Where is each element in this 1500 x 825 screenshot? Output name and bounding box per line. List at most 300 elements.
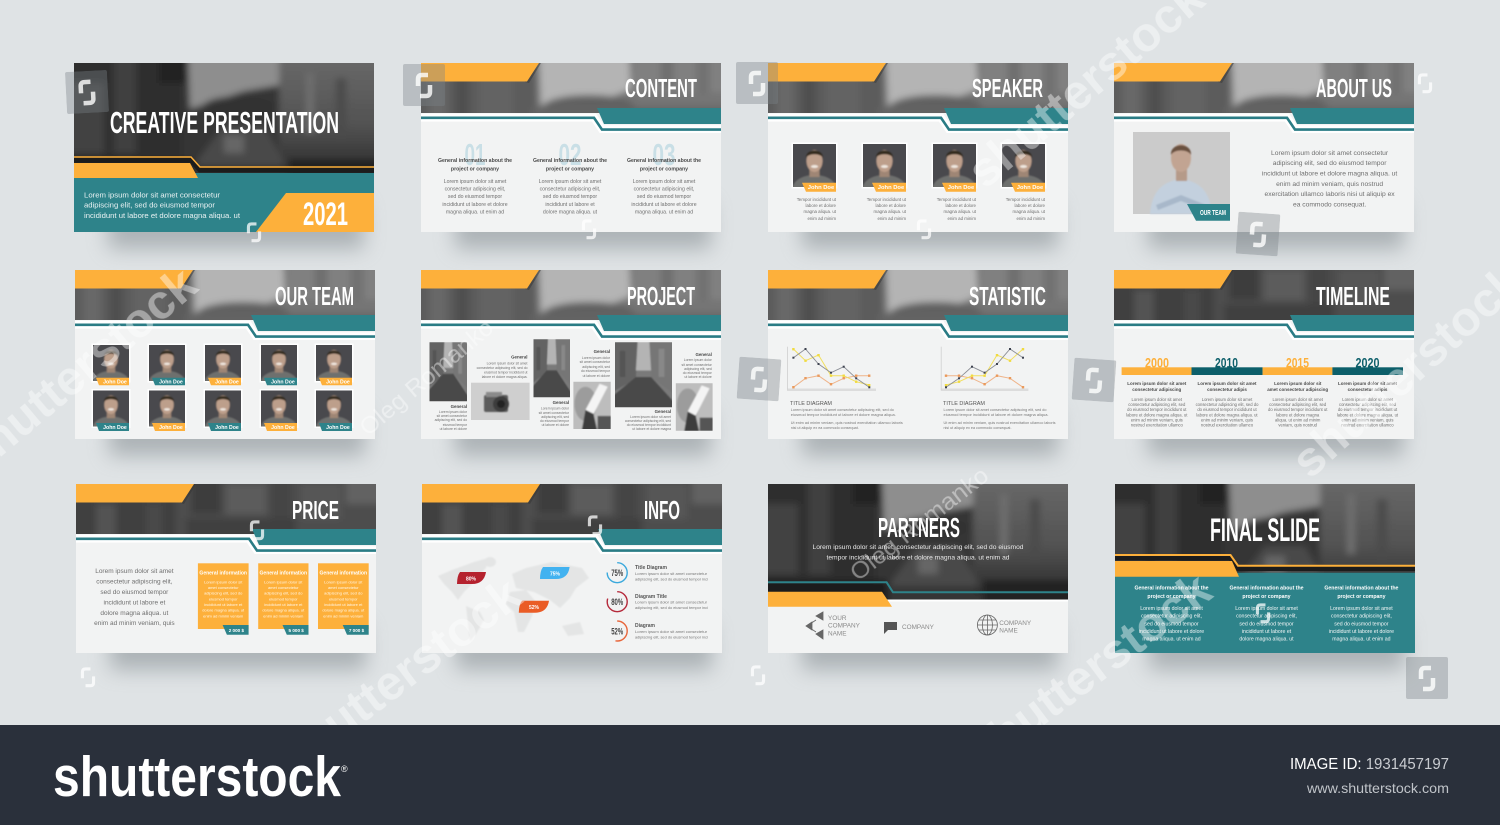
timeline text columns: consectetur adipiscing elit, sed: [1269, 402, 1327, 407]
timeline text columns: nostrud exercitation ullamco: [1201, 422, 1254, 428]
body text: incididunt ut labore et dolore magna aliqua. ut: [1262, 170, 1397, 177]
team grid: John Doe: [326, 425, 350, 431]
timeline text columns: [1126, 381, 1399, 428]
timeline text columns: consectetur adipiscing elit, sed do: [1196, 402, 1259, 407]
column text 2: project or company: [1242, 594, 1291, 600]
speaker card 4: Tempor incididunt ut: [1006, 197, 1046, 202]
intro text: dolore magna aliqua. ut: [100, 610, 169, 617]
caption blocks: [435, 349, 713, 431]
column text 3: consectetur adipiscing elit,: [1331, 614, 1392, 620]
price card 3: incididunt ut labore et: [324, 602, 363, 607]
chart text 2: eiusmod tempor incididunt ut labore et dolore magna aliqua.: [944, 413, 1048, 417]
column text 1: consectetur adipiscing elit,: [445, 186, 505, 192]
chart text 1: TITLE DIAGRAM: [790, 401, 833, 407]
price card 1: eiusmod tempor: [209, 596, 238, 601]
price card 3: [318, 563, 369, 635]
panel: speaker slide: [758, 53, 1078, 232]
timeline text columns: nostrud exercitation ullamco: [1341, 422, 1394, 428]
column text 3: consectetur adipiscing elit,: [634, 186, 694, 192]
speaker card 4: enim ad minim: [1016, 216, 1045, 221]
footer bar: [0, 725, 1500, 825]
subtitle: [812, 544, 1024, 562]
speaker card 4: John Doe: [1017, 185, 1044, 191]
map tag: blue: 75%: [550, 572, 561, 578]
column text 1: General information about the: [1134, 586, 1209, 592]
team grid: John Doe: [271, 425, 295, 431]
column text 3: incididunt ut labore et dolore: [1329, 629, 1394, 635]
timeline text columns: enim ad minim veniam, quis: [1342, 418, 1393, 422]
logo: your company name: COMPANY: [828, 623, 861, 630]
speaker card 2: John Doe: [878, 185, 905, 191]
panel: partners slide: [758, 474, 1078, 664]
caption blocks: do eiusmod tempor incididunt: [627, 423, 671, 427]
speaker card 1: John Doe: [808, 185, 835, 191]
caption blocks: General: [594, 349, 610, 354]
timeline text columns: veniam, quis nostrud: [1278, 422, 1318, 428]
speaker card 3: [930, 141, 979, 221]
label: our team: [1187, 204, 1230, 221]
column text 3: magna aliqua. ut enim ad: [635, 210, 693, 216]
column text 2: General information about the: [533, 158, 607, 164]
donut: 80%: [607, 592, 627, 612]
caption blocks: ut labore et dolore magna: [632, 427, 671, 431]
timeline years: 2010: [1215, 354, 1238, 370]
speaker card 4: magna aliqua. ut: [1013, 209, 1046, 214]
price card 1: Lorem ipsum dolor sit: [204, 579, 243, 584]
chart text 2: TITLE DIAGRAM: [943, 401, 986, 407]
donut captions: Lorem ipsum dolor sit amet consectetur: [635, 630, 708, 634]
column text 1: magna aliqua. ut enim ad: [1142, 637, 1201, 643]
price card 1: enim ad minim veniam: [203, 613, 244, 618]
chart text 1: Ut enim ad minim veniam, quis nostrud exercitation ullamco laboris: [791, 421, 903, 425]
panel: our team slide: [65, 260, 385, 439]
panel: statistic slide: [758, 260, 1078, 439]
speaker card 1: [790, 141, 839, 221]
speaker card 3: enim ad minim: [947, 216, 976, 221]
column text 1: [438, 158, 512, 216]
slide shadows: [108, 203, 1405, 670]
price card 1: dolore magna aliqua. ut: [202, 608, 245, 613]
intro text: [94, 568, 175, 627]
map tag: orange: [519, 601, 549, 613]
subtitle: tempor incididunt ut labore et dolore magna aliqua. ut enim ad: [826, 555, 1010, 562]
chart text 2: nisi ut aliquip ex ea commodo consequat.: [944, 426, 1012, 430]
column text 2: General information about the: [1229, 586, 1304, 592]
logo: your company name: YOUR: [828, 615, 847, 622]
team grid: John Doe: [103, 379, 127, 385]
timeline bar: [1122, 367, 1403, 375]
donut: 75%: [607, 563, 627, 583]
price card 1: 2 000 $: [229, 628, 245, 633]
logo: company globe: [977, 615, 1032, 635]
intro text: adipiscing elit, sed do eiusmod tempor: [84, 200, 216, 210]
line chart 2: [941, 347, 1028, 391]
caption blocks: General: [553, 400, 569, 405]
label: our team: OUR TEAM: [1200, 210, 1226, 217]
column text 1: magna aliqua. ut enim ad: [446, 210, 504, 216]
speaker card 3: labore et dolore: [945, 203, 977, 208]
caption blocks: Lorem ipsum dolor: [582, 356, 611, 360]
body text: [1262, 150, 1397, 208]
team grid: John Doe: [271, 379, 295, 385]
title: PARTNERS: [878, 512, 960, 543]
price card 1: incididunt ut labore et: [204, 602, 243, 607]
caption blocks: Lorem ipsum dolor: [439, 410, 468, 414]
intro text: sed do eiusmod tempor: [100, 589, 169, 596]
speaker card 1: magna aliqua. ut: [804, 209, 837, 214]
column text 1: sed do eiusmod tempor: [448, 194, 502, 200]
column text 2: sed do eiusmod tempor: [543, 194, 597, 200]
logo: your company name: [806, 612, 861, 639]
price card 2: eiusmod tempor: [269, 596, 298, 601]
timeline text columns: Lorem ipsum dolor sit amet: [1338, 381, 1398, 386]
world map: [438, 557, 589, 641]
team grid: [90, 342, 355, 431]
timeline text columns: consectetur adipiscing elit, sed: [1339, 402, 1397, 407]
donut captions: Lorem ipsum dolor sit amet consectetur: [635, 601, 708, 605]
timeline text columns: do eiusmod tempor incididunt ut: [1127, 407, 1187, 412]
column text 3: magna aliqua. ut enim ad: [1332, 637, 1391, 643]
speaker card 3: Tempor incididunt ut: [937, 197, 977, 202]
price card 3: General information: [320, 570, 367, 576]
column text 2: Lorem ipsum dolor sit amet: [1235, 606, 1298, 612]
caption blocks: General: [511, 354, 528, 360]
watermark text: Oleg Romanko: [355, 314, 499, 442]
panel: timeline slide: [1104, 260, 1424, 439]
price card 2: [258, 563, 308, 635]
title: ABOUT US: [1316, 73, 1392, 103]
caption blocks: adipiscing elit, sed: [684, 367, 712, 371]
timeline text columns: consectetur adipiscing: [1132, 387, 1182, 392]
timeline text columns: Lorem ipsum dolor sit amet: [1202, 397, 1253, 402]
column text 2: consectetur adipiscing elit,: [1236, 614, 1297, 620]
column text 2: dolore magna aliqua. ut: [543, 210, 598, 216]
chart text 1: Lorem ipsum dolor sit amet consectetur adipiscing elit, sed do: [791, 408, 894, 412]
timeline text columns: amet consectetur adipiscing: [1267, 387, 1328, 392]
timeline years: 2015: [1286, 354, 1309, 370]
body text: enim ad minim veniam, quis nostrud: [1276, 181, 1383, 188]
registered mark: ®: [341, 764, 348, 774]
column text 3: General information about the: [627, 158, 701, 164]
column text 1: project or company: [1147, 594, 1196, 600]
panel: final slide: [1105, 474, 1425, 664]
year: 2021: [303, 196, 348, 232]
caption blocks: General: [655, 409, 671, 414]
speaker card 2: labore et dolore: [875, 203, 907, 208]
caption blocks: ut labore et dolore: [542, 423, 569, 427]
timeline text columns: do eiusmod tempor incididunt ut: [1338, 407, 1398, 412]
column text 1: Lorem ipsum dolor sit amet: [444, 179, 507, 185]
column numbers: 03: [652, 137, 676, 172]
title: PRICE: [292, 495, 339, 525]
column numbers: [464, 137, 676, 172]
watermark icons: [65, 62, 1448, 699]
portrait: [1133, 132, 1230, 214]
photo: camera: [471, 383, 530, 420]
caption blocks: adipiscing elit, sed do: [435, 418, 467, 422]
donut captions: adipiscing elit, sed do eiusmod tempor inci: [635, 635, 708, 639]
column text 2: [1229, 586, 1304, 643]
column text 3: sed do eiusmod tempor: [637, 194, 691, 200]
price card 3: Lorem ipsum dolor sit: [324, 579, 363, 584]
body text: adipiscing elit, sed do eiusmod tempor: [1273, 160, 1387, 167]
donut captions: Lorem ipsum dolor sit amet consectetur: [635, 572, 708, 576]
timeline years: 2000: [1145, 354, 1169, 370]
photo: hand with phone 2: [673, 380, 716, 434]
logo: company speech bubble: [884, 622, 935, 634]
chart text 2: [943, 401, 1056, 430]
price card 3: dolore magna aliqua. ut: [322, 608, 365, 613]
column text 1: consectetur adipiscing elit,: [1141, 614, 1202, 620]
column text 2: [533, 158, 607, 216]
price card 2: incididunt ut labore et: [264, 602, 303, 607]
timeline text columns: labore et dolore magna aliqua. ut: [1126, 412, 1188, 418]
column numbers: 02: [558, 137, 582, 172]
column text 3: Lorem ipsum dolor sit amet: [1330, 606, 1393, 612]
donut: 75%: 75%: [611, 568, 623, 578]
intro text: incididunt ut labore et: [104, 600, 165, 607]
caption blocks: adipiscing elit, sed: [541, 415, 569, 419]
caption blocks: consectetur adipiscing elit, sed do: [477, 366, 528, 370]
caption blocks: Lorem ipsum dolor: [541, 406, 570, 410]
intro text: Lorem ipsum dolor sit amet: [95, 568, 174, 575]
intro text: Lorem ipsum dolor sit amet consectetur: [84, 190, 221, 200]
title: STATISTIC: [969, 281, 1046, 311]
speaker card 1: enim ad minim: [807, 216, 836, 221]
line chart 1: [787, 347, 876, 391]
donut captions: adipiscing elit, sed do eiusmod tempor inci: [635, 606, 708, 610]
donut: 80%: 80%: [611, 597, 623, 607]
caption blocks: sit amet consectetur: [437, 414, 468, 418]
timeline text columns: Lorem ipsum dolor sit amet: [1197, 381, 1257, 386]
price card 2: adipiscing elit, sed do: [264, 591, 303, 596]
caption blocks: ut labore et dolore: [440, 427, 467, 431]
speaker card 2: magna aliqua. ut: [874, 209, 907, 214]
timeline text columns: consectetur adipis: [1348, 387, 1388, 392]
caption blocks: Lorem ipsum dolor: [684, 358, 713, 362]
column text 2: dolore magna aliqua. ut: [1239, 637, 1294, 643]
timeline text columns: Lorem ipsum dolor sit amet: [1132, 397, 1183, 402]
column text 1: [1134, 586, 1209, 643]
donut captions: Diagram: [635, 623, 656, 629]
column text 3: [1324, 586, 1399, 643]
team grid: John Doe: [326, 379, 350, 385]
price card 1: amet consectetur: [208, 585, 239, 590]
column text 3: sed do eiusmod tempor: [1334, 622, 1389, 628]
donut captions: [635, 565, 708, 639]
price card 1: General information: [199, 570, 247, 576]
caption blocks: consectetur adipiscing elit, sed: [625, 419, 671, 423]
speaker card 2: enim ad minim: [877, 216, 906, 221]
price card 2: dolore magna aliqua. ut: [262, 608, 305, 613]
caption blocks: Lorem ipsum dolor sit amet: [487, 362, 528, 366]
caption blocks: eiusmod tempor incididunt ut: [484, 370, 528, 374]
column text 3: project or company: [640, 166, 688, 172]
speaker card 2: Tempor incididunt ut: [867, 197, 907, 202]
intro text: incididunt ut labore et dolore magna aliqua. ut: [84, 211, 240, 220]
chart text 1: eiusmod tempor incididunt ut labore et dolore magna aliqua.: [791, 413, 896, 417]
donut captions: Diagram Title: [635, 594, 667, 600]
column text 2: Lorem ipsum dolor sit amet: [539, 179, 602, 185]
chart text 1: nisi ut aliquip ex ea commodo consequat.: [791, 426, 859, 430]
column text 3: incididunt ut labore et dolore: [631, 202, 697, 208]
website: www.shutterstock.com: [1306, 780, 1449, 796]
panel: content slide: [411, 53, 731, 232]
column text 1: incididunt ut labore et dolore: [442, 202, 508, 208]
price card 3: amet consectetur: [328, 585, 359, 590]
caption blocks: do eiusmod tempor: [683, 371, 713, 375]
watermark text: shutterstock: [268, 568, 531, 785]
column text 3: [627, 158, 701, 216]
column text 3: project or company: [1337, 594, 1386, 600]
image id: IMAGE ID: 1931457197: [1290, 756, 1449, 773]
column text 2: incididunt ut labore et: [545, 202, 595, 208]
title: OUR TEAM: [275, 281, 354, 311]
logo: company globe: NAME: [999, 628, 1018, 634]
speaker card 3: John Doe: [948, 185, 975, 191]
column text 2: sed do eiusmod tempor: [1239, 622, 1294, 628]
price card 3: enim ad minim veniam: [323, 613, 364, 618]
timeline text columns: labore et dolore magna aliqua. ut: [1196, 412, 1258, 418]
photo: street 3: [612, 339, 675, 411]
price card 1: [198, 563, 249, 635]
speaker card 4: labore et dolore: [1014, 203, 1046, 208]
column text 1: sed do eiusmod tempor: [1144, 622, 1199, 628]
price card 3: 7 000 $: [349, 628, 365, 633]
caption blocks: labore et dolore magna aliqua.: [482, 375, 528, 379]
price card 3: adipiscing elit, sed do: [324, 591, 363, 596]
timeline text columns: enim ad minim veniam, quis: [1201, 418, 1253, 422]
team grid: John Doe: [103, 425, 127, 431]
price card 2: amet consectetur: [268, 585, 299, 590]
panel: price slide: [66, 474, 386, 653]
intro text: enim ad minim veniam, quis: [94, 620, 175, 627]
panel: about us slide: [1104, 53, 1424, 232]
timeline text columns: labore et dolore magna: [1276, 412, 1320, 418]
column text 1: General information about the: [438, 158, 512, 164]
caption blocks: adipiscing elit, sed: [582, 365, 610, 369]
speaker card 2: [860, 141, 909, 221]
title: TIMELINE: [1316, 281, 1390, 311]
map tag: red: 80%: [466, 576, 477, 582]
speaker card 4: [999, 141, 1048, 221]
photo: street: [428, 339, 469, 404]
column numbers: 01: [464, 137, 486, 172]
donut: 52%: 52%: [611, 626, 623, 636]
body text: exercitation ullamco laboris nisi ut aliquip ex: [1265, 191, 1395, 198]
caption blocks: eiusmod tempor: [443, 423, 468, 427]
title: SPEAKER: [972, 73, 1043, 103]
map tag: orange: 52%: [529, 605, 540, 611]
caption blocks: sit amet consectetur: [681, 363, 713, 367]
caption blocks: do eiusmod tempor: [540, 419, 570, 423]
price card 2: Lorem ipsum dolor sit: [264, 579, 303, 584]
timeline years: [1145, 354, 1380, 370]
intro text: [84, 190, 240, 220]
timeline text columns: nostrud exercitation ullamco: [1131, 422, 1184, 428]
column text 3: General information about the: [1324, 586, 1399, 592]
price card 3: eiusmod tempor: [329, 596, 358, 601]
column text 2: consectetur adipiscing elit,: [540, 186, 600, 192]
timeline text columns: Lorem ipsum dolor sit amet: [1272, 397, 1324, 402]
column text 2: project or company: [546, 166, 594, 172]
timeline text columns: do eiusmod tempor incididunt ut: [1268, 407, 1328, 412]
speaker card 1: labore et dolore: [805, 203, 837, 208]
watermark text: shutterstock: [958, 563, 1221, 780]
photo: hand with phone: [570, 379, 614, 432]
caption blocks: General: [451, 404, 467, 409]
donut captions: adipiscing elit, sed do eiusmod tempor inci: [635, 577, 708, 581]
price card 2: 5 000 $: [289, 628, 304, 633]
timeline years: 2020: [1356, 354, 1380, 370]
speaker card 3: magna aliqua. ut: [944, 209, 977, 214]
team grid: John Doe: [159, 379, 183, 385]
panel: info slide: [412, 474, 732, 653]
timeline text columns: Lorem ipsum dolor sit: [1274, 381, 1322, 386]
column text 1: project or company: [451, 166, 499, 172]
chart text 1: [790, 401, 903, 430]
price card 1: adipiscing elit, sed do: [204, 591, 243, 596]
intro text: consectetur adipiscing elit,: [96, 579, 173, 586]
team grid: John Doe: [159, 425, 183, 431]
title: CREATIVE PRESENTATION: [110, 105, 339, 140]
caption blocks: do eiusmod tempor: [581, 369, 611, 373]
column text 3: Lorem ipsum dolor sit amet: [633, 179, 696, 185]
caption blocks: ut labore et dolore: [684, 375, 712, 379]
donut captions: Title Diagram: [635, 565, 668, 571]
map tag: red: [457, 572, 486, 584]
photo: street 2: [532, 336, 572, 400]
shutterstock logo: shutterstock: [53, 745, 341, 809]
title: INFO: [644, 495, 680, 525]
panel: project slide: [411, 260, 731, 439]
caption blocks: sit amet consectetur: [539, 411, 570, 415]
caption blocks: sit amet consectetur: [580, 360, 611, 364]
chart text 2: Lorem ipsum dolor sit amet consectetur adipiscing elit, sed do: [944, 408, 1046, 412]
chart text 2: Ut enim ad minim veniam, quis nostrud exercitation ullamco laboris: [944, 421, 1056, 425]
watermark text: Oleg Romanko: [845, 462, 994, 587]
team grid: John Doe: [215, 379, 239, 385]
title: FINAL SLIDE: [1210, 512, 1320, 548]
title: CONTENT: [625, 73, 697, 103]
timeline text columns: consectetur adipis: [1207, 387, 1247, 392]
timeline text columns: enim ad minim veniam, quis: [1131, 418, 1183, 422]
column text 1: Lorem ipsum dolor sit amet: [1140, 606, 1203, 612]
timeline text columns: consectetur adipiscing elit, sed: [1128, 402, 1186, 407]
panel: cover slide, creative presentation: [64, 53, 384, 243]
logo: company globe: COMPANY: [999, 620, 1032, 627]
title: PROJECT: [627, 281, 695, 311]
body text: ea commodo consequat.: [1293, 201, 1366, 208]
column text 2: incididunt ut labore et: [1242, 629, 1292, 635]
timeline text columns: aliqua. ut enim ad minim: [1275, 418, 1321, 422]
map tag: blue: [540, 567, 570, 579]
caption blocks: Lorem ipsum dolor sit amet: [630, 415, 671, 419]
price card 2: General information: [260, 570, 307, 576]
logo: company speech bubble: COMPANY: [902, 624, 935, 631]
caption blocks: ut labore et dolore: [583, 374, 610, 378]
body text: Lorem ipsum dolor sit amet consectetur: [1271, 150, 1389, 157]
caption blocks: General: [695, 352, 712, 357]
subtitle: Lorem ipsum dolor sit amet, consectetur adipiscing elit, sed do eiusmod: [812, 544, 1024, 551]
price card 2: enim ad minim veniam: [263, 613, 304, 618]
timeline text columns: Lorem ipsum dolor sit amet: [1127, 381, 1187, 386]
donut: 52%: [607, 621, 627, 641]
speaker card 1: Tempor incididunt ut: [797, 197, 837, 202]
timeline text columns: do eiusmod tempor incididunt ut: [1197, 407, 1258, 412]
team grid: John Doe: [215, 425, 239, 431]
logo: your company name: NAME: [828, 630, 846, 637]
